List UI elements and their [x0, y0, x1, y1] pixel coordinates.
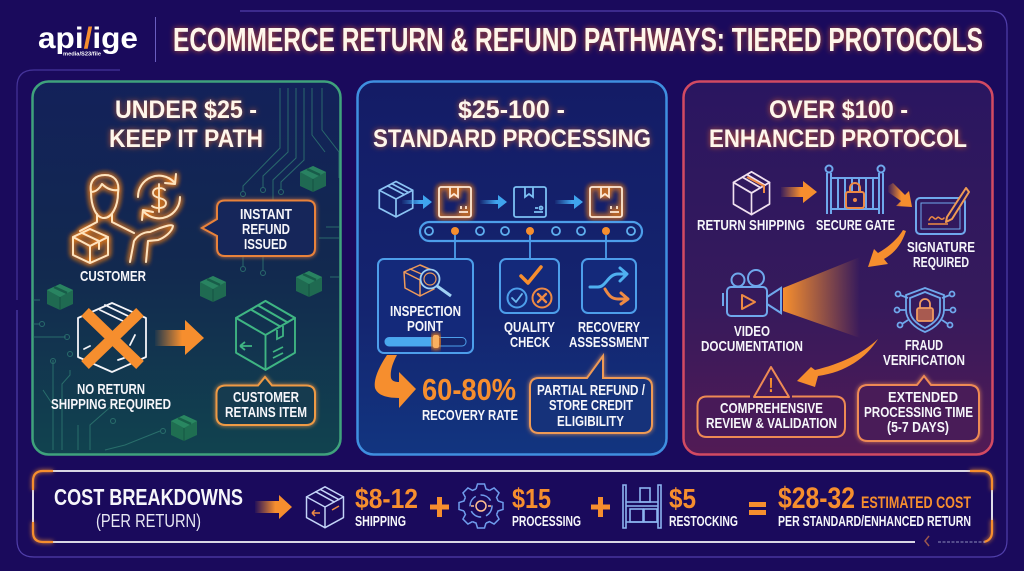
panel: cost breakdown bar: [33, 471, 992, 546]
cost: processing: [512, 483, 581, 530]
progress bar: [385, 335, 466, 348]
box: inspection point: INSPECTION: [390, 303, 461, 320]
label: video documentation: VIDEO: [734, 323, 770, 340]
heading: [709, 96, 967, 153]
panel: over $100 enhanced protocol: [684, 82, 992, 454]
logo: api/ige: [38, 22, 138, 55]
logo: media/S23/file: [63, 52, 101, 58]
heading: $25-100 -: [458, 96, 565, 124]
cost: shipping: [355, 483, 418, 530]
label: no return shipping required: SHIPPING REQUIRED: [51, 396, 171, 413]
heading: cost breakdowns: [54, 484, 243, 531]
icon: customer with refund: [73, 174, 180, 263]
icon: crossed-out return box: [78, 303, 146, 372]
panel: under $25 keep it path: [32, 82, 340, 454]
labels: return shipping, secure gate, signature: REQUIRED: [913, 254, 969, 271]
callout: extended processing time: EXTENDED: [888, 389, 958, 406]
box: inspection point: [378, 259, 473, 353]
callout: comprehensive review: [698, 367, 845, 437]
box: quality check: [500, 259, 559, 313]
callout: partial refund: STORE CREDIT: [549, 397, 633, 414]
icon: shipping box: [307, 487, 343, 528]
icon: package square 2: [514, 187, 546, 217]
icon: fraud shield: [894, 288, 956, 332]
callout: extended processing time: PROCESSING TIME: [864, 404, 973, 421]
labels: quality and recovery: [504, 319, 649, 351]
icon: restocking shelf: [623, 485, 661, 528]
icon: package square 1: [439, 187, 471, 217]
icon: incoming box: [379, 182, 413, 217]
label: customer: CUSTOMER: [80, 268, 146, 285]
heading: [109, 96, 263, 153]
watermark: [925, 536, 985, 546]
equals: [749, 504, 766, 512]
icon: processing gear: [459, 484, 503, 528]
icon: video camera with beam: [723, 257, 860, 338]
arrow: step 2: [480, 195, 507, 209]
cost: restocking: RESTOCKING: [669, 514, 738, 530]
labels: quality and recovery: CHECK: [510, 334, 550, 351]
label: no return shipping required: [51, 381, 171, 413]
heading: KEEP IT PATH: [109, 125, 263, 153]
callout: partial refund: [530, 356, 652, 433]
cost: processing: $15: [512, 483, 551, 514]
labels: return shipping, secure gate, signature: SIGNATURE: [907, 239, 975, 256]
icon: return shipping box: [733, 172, 770, 215]
callout: customer retains item: RETAINS ITEM: [225, 404, 307, 421]
callout: customer retains item: CUSTOMER: [233, 389, 299, 406]
heading: [373, 96, 651, 153]
box: inspection point: POINT: [407, 318, 443, 335]
arrow: step 3: [555, 195, 583, 209]
heading: STANDARD PROCESSING: [373, 125, 651, 153]
callout: customer retains item: [216, 377, 315, 425]
callout: comprehensive review: REVIEW & VALIDATION: [706, 415, 837, 432]
heading: UNDER $25 -: [115, 96, 257, 124]
cost: estimated total: ESTIMATED COST: [861, 493, 971, 512]
decorative cubes: [47, 166, 326, 441]
panel: $25-100 standard processing: [358, 82, 666, 454]
plus: [591, 497, 610, 517]
callout: instant refund issued: REFUND: [242, 221, 290, 238]
cost: restocking: [669, 483, 738, 530]
callout: partial refund: ELIGIBILITY: [557, 413, 624, 430]
callout: extended processing time: [858, 376, 979, 441]
arrow: curved to review: [797, 339, 878, 387]
cost: processing: PROCESSING: [512, 514, 581, 530]
stat: 60-80% recovery rate: RECOVERY RATE: [422, 407, 518, 424]
labels: return shipping, secure gate, signature: RETURN SHIPPING: [697, 217, 805, 234]
labels: quality and recovery: QUALITY: [504, 319, 555, 336]
icon: secure gate: [826, 166, 884, 214]
circuit pattern: [33, 88, 339, 450]
label: fraud verification: [883, 337, 965, 369]
stat: 60-80% recovery rate: 60-80%: [422, 372, 516, 407]
callout: comprehensive review: !: [768, 375, 774, 397]
heading: OVER $100 -: [769, 96, 908, 124]
heading: cost breakdowns: (PER RETURN): [96, 511, 201, 531]
callout: extended processing time: (5-7 DAYS): [887, 419, 949, 436]
arrow: curved to recovery rate: [375, 355, 416, 408]
arrow: curved to video: [868, 230, 906, 267]
icon: retained box: [236, 301, 295, 370]
cost: estimated total: $28-32: [778, 482, 855, 515]
labels: quality and recovery: RECOVERY: [578, 319, 640, 336]
icon: signature tablet: [916, 188, 969, 234]
cost: estimated total: [778, 482, 971, 530]
callout: partial refund: PARTIAL REFUND /: [537, 382, 646, 399]
cost: shipping: $8-12: [355, 483, 418, 514]
arrow: to gate: [781, 181, 817, 203]
heading: ENHANCED PROTOCOL: [709, 125, 967, 153]
labels: return shipping, secure gate, signature: SECURE GATE: [816, 217, 895, 234]
callout: instant refund issued: INSTANT: [240, 206, 292, 223]
icon: package square 3: [590, 187, 622, 217]
label: video documentation: DOCUMENTATION: [701, 338, 803, 355]
label: video documentation: [701, 323, 803, 355]
callout: instant refund issued: ISSUED: [244, 236, 287, 253]
arrow: to signature: [888, 183, 912, 207]
conveyor belt: [420, 222, 642, 259]
arrow: step 1: [402, 195, 432, 209]
plus: [430, 497, 449, 517]
label: fraud verification: VERIFICATION: [883, 352, 965, 369]
cost: shipping: SHIPPING: [355, 514, 406, 530]
heading: cost breakdowns: COST BREAKDOWNS: [54, 484, 243, 510]
label: no return shipping required: NO RETURN: [77, 381, 145, 398]
arrow: to retained box: [155, 320, 204, 355]
labels: quality and recovery: ASSESSMENT: [569, 334, 649, 351]
stat: 60-80% recovery rate: [422, 372, 518, 424]
callout: comprehensive review: COMPREHENSIVE: [720, 400, 823, 417]
labels: return shipping, secure gate, signature: [697, 217, 975, 271]
callout: instant refund issued: [202, 200, 315, 256]
cost: restocking: $5: [669, 483, 696, 514]
label: fraud verification: FRAUD: [905, 337, 943, 354]
arrow: cost: [255, 495, 292, 519]
box: recovery assessment: [582, 259, 636, 313]
